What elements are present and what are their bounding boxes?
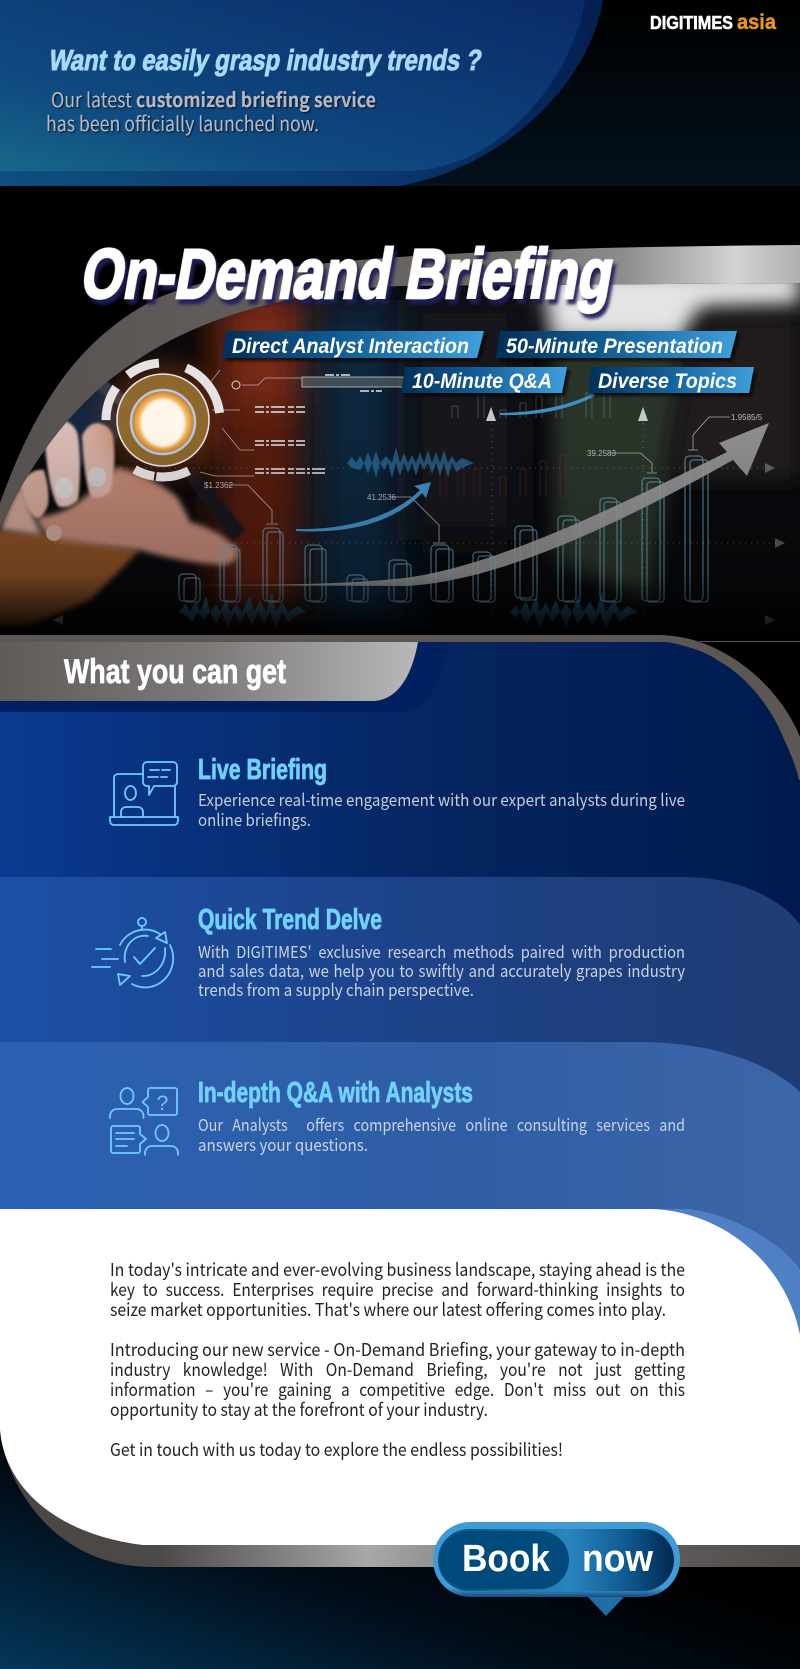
graphic: dotted grid and faint bars: [55, 388, 780, 620]
intro text: [46, 84, 376, 137]
button: Book now: [433, 1522, 680, 1616]
panel: in-depth Q&A: [0, 1042, 800, 1420]
graphic: glowing gear: [103, 360, 223, 480]
button: Book now: Book: [462, 1538, 551, 1580]
heading: want to easily grasp: Want to easily grasp industry trends ?: [47, 45, 484, 77]
heading: in-depth Q&A: In-depth Q&A with Analysts: [198, 1077, 473, 1109]
description: online briefings.: [198, 807, 311, 831]
tag: Direct Analyst Interaction: Direct Analyst Interaction: [232, 335, 469, 358]
intro text: Our latest customized briefing service: [51, 84, 376, 113]
title: On-Demand Briefing: On-Demand Briefing: [76, 234, 620, 313]
panel: bottom background: [0, 1209, 800, 1669]
icon: laptop video chat: [110, 762, 178, 825]
heading: quick trend delve: Quick Trend Delve: [198, 904, 382, 936]
intro text: has been officially launched now.: [46, 108, 319, 137]
photo fade at bottom: [0, 456, 800, 635]
panel: what you can get band: [0, 635, 800, 1000]
tab: what you can get: What you can get: [64, 653, 286, 691]
photo: hand holding pen: [0, 378, 245, 625]
graphic: blue waveforms: [179, 447, 638, 630]
paragraph 2: industry knowledge! With On-Demand Briefing, you're not just getting: [110, 1357, 685, 1382]
paragraph 1: [110, 1257, 685, 1322]
graphic: callout lines and values: [204, 413, 763, 543]
graphic: triangles: [53, 407, 785, 625]
decorative arc around hero: [0, 245, 800, 527]
tag: 50-Minute Presentation: 50-Minute Presentation: [506, 335, 723, 358]
graphic: callout lines and values: 1.9585/5: [731, 413, 763, 422]
tag: Diverse Topics: Diverse Topics: [598, 370, 737, 393]
description: and sales data, we help you to swiftly and accurately grapes industry: [198, 958, 685, 982]
paragraph 1: In today's intricate and ever-evolving business landscape, staying ahead is the: [110, 1257, 685, 1282]
description: Experience real-time engagement with our expert analysts during live: [198, 787, 685, 811]
description: trends from a supply chain perspective.: [198, 977, 474, 1001]
tag: 10-Minute Q&A: 10-Minute Q&A: [412, 370, 552, 393]
description: Our Analysts offers comprehensive online consulting services and: [198, 1112, 685, 1136]
logo: DIGITIMES asia: asia: [737, 11, 776, 34]
logo: DIGITIMES asia: DIGITIMES: [650, 13, 733, 33]
paragraph 3: Get in touch with us today to explore the endless possibilities!: [110, 1437, 563, 1462]
paragraph 2: Introducing our new service - On-Demand Briefing, your gateway to in-depth: [110, 1337, 685, 1362]
graphic: callout lines and values: 41.2536: [367, 493, 396, 502]
tab: what you can get: [0, 642, 418, 701]
logo: DIGITIMES asia: [650, 11, 776, 34]
graphic: callout lines and values: $1.2362: [204, 481, 233, 490]
panel: live briefing: [110, 754, 685, 831]
glyph: question mark: ?: [157, 1092, 168, 1115]
icon: people with question: [110, 1088, 178, 1155]
panel: hero photo with analytics overlay: [0, 270, 800, 640]
photo: blurred office background: [30, 270, 800, 640]
paragraph 2: [110, 1337, 685, 1422]
description: [198, 787, 685, 831]
paragraph 2: information – you're gaining a competitive edge. Don't miss out on this: [110, 1377, 685, 1402]
description: answers your questions.: [198, 1132, 368, 1156]
description: With DIGITIMES' exclusive research methods paired with production: [198, 939, 685, 963]
heading: live briefing: Live Briefing: [198, 754, 327, 786]
arrow: large gray growth curve: [182, 423, 769, 586]
paragraph 2: opportunity to stay at the forefront of your industry.: [110, 1397, 488, 1422]
panel: quick trend delve: [0, 877, 800, 1150]
panel: intro copy: [0, 1209, 800, 1545]
description: [198, 939, 685, 1001]
graphic: callout lines and values: 39.2583: [587, 449, 616, 458]
arrow: blue small trend: [296, 393, 595, 531]
panel: top header: [0, 0, 800, 186]
icon: stopwatch with check: [92, 918, 173, 987]
graphic: HUD data rows: [200, 370, 404, 476]
paragraph 1: seize market opportunities. That's where our latest offering comes into play.: [110, 1297, 666, 1322]
description: [198, 1112, 685, 1156]
button: Book now: now: [582, 1538, 653, 1580]
paragraph 1: key to success. Enterprises require precise and forward-thinking insights to: [110, 1277, 685, 1302]
chart: rising bars: [179, 456, 708, 602]
